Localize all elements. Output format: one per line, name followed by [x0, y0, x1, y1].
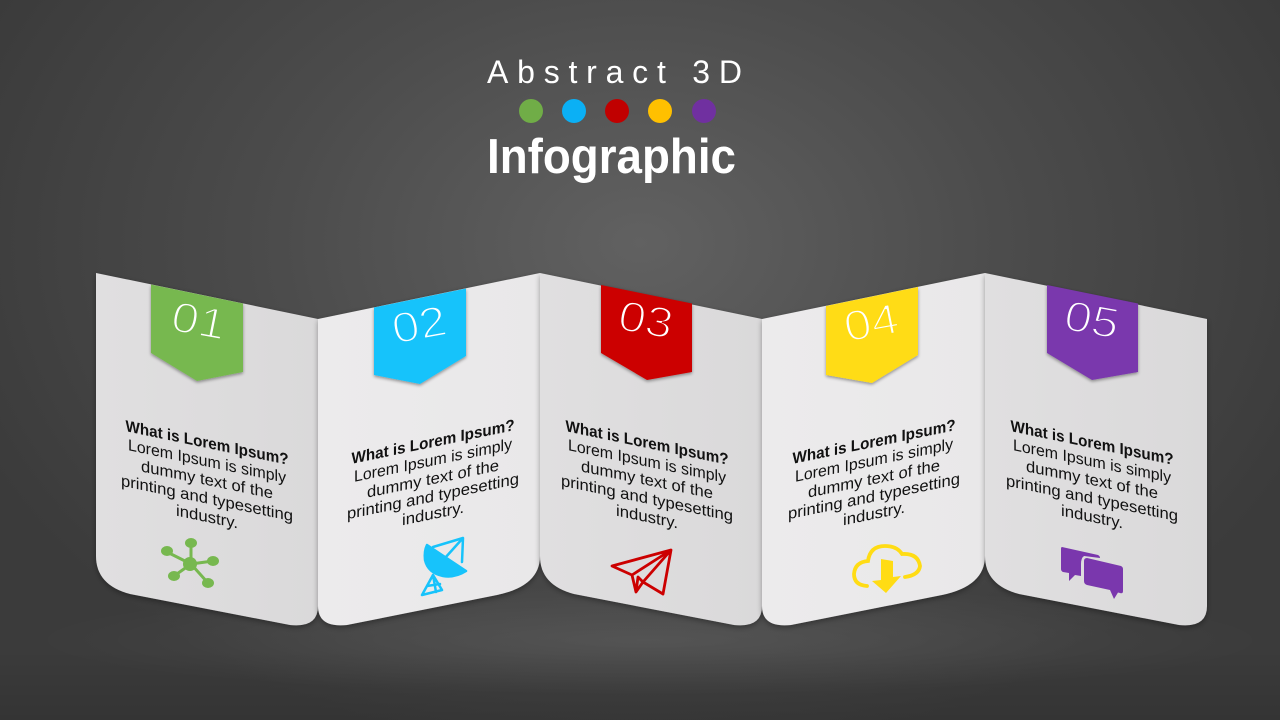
- card 5: [985, 273, 1207, 625]
- icon: satellite dish: [422, 538, 466, 595]
- ribbon 1: [151, 284, 243, 381]
- title line: Abstract 3D: Abstract 3D: [487, 54, 742, 90]
- ribbon 5: [1047, 285, 1138, 380]
- text block 1: Lorem Ipsum is simply: [128, 436, 287, 487]
- number 03: 03: [614, 291, 678, 348]
- ribbon 4: [826, 287, 918, 383]
- icon: paper plane: [612, 550, 671, 594]
- panel 4: [762, 273, 985, 625]
- text block 4: What is Lorem Ipsum?: [792, 416, 956, 468]
- text block 1: What is Lorem Ipsum?: [126, 417, 288, 469]
- icon: cloud download: [854, 546, 920, 593]
- text block 4: [788, 415, 960, 541]
- text block 3: printing and typesetting: [561, 472, 733, 525]
- ribbon 3: [601, 285, 692, 380]
- text block 2: printing and typesetting: [347, 470, 519, 523]
- text block 3: dummy text of the: [581, 457, 713, 503]
- text block 2: dummy text of the: [367, 456, 499, 502]
- text block 4: dummy text of the: [808, 456, 940, 502]
- text block 3: Lorem Ipsum is simply: [568, 436, 727, 487]
- card 1: [96, 273, 318, 625]
- panel 3: [540, 273, 762, 625]
- number 02: 02: [387, 296, 451, 353]
- text block 4: printing and typesetting: [788, 470, 960, 523]
- panel 5: [985, 273, 1207, 625]
- card 2: [318, 273, 540, 625]
- text block 3: What is Lorem Ipsum?: [566, 417, 728, 469]
- text block 5: What is Lorem Ipsum?: [1010, 417, 1174, 469]
- text block 2: industry.: [402, 499, 464, 529]
- text block 5: industry.: [1061, 502, 1123, 532]
- icon: network: [161, 538, 219, 588]
- title line: Infographic: Infographic: [487, 130, 736, 184]
- text block 4: Lorem Ipsum is simply: [795, 435, 954, 486]
- text block 5: printing and typesetting: [1006, 472, 1178, 525]
- number 01: 01: [167, 292, 231, 349]
- text block 3: [561, 416, 733, 544]
- card 4: [762, 273, 985, 625]
- number 04: 04: [839, 294, 903, 351]
- text block 1: industry.: [176, 502, 238, 532]
- icon: chat bubbles: [1061, 547, 1123, 599]
- text block 5: [1006, 416, 1178, 544]
- text block 2: Lorem Ipsum is simply: [354, 435, 513, 486]
- panel 1: [96, 273, 318, 625]
- text block 4: industry.: [843, 499, 905, 529]
- text block 1: [121, 416, 293, 544]
- number 05: 05: [1060, 291, 1124, 348]
- text block 1: printing and typesetting: [121, 472, 293, 525]
- text block 3: industry.: [616, 502, 678, 532]
- card 3: [540, 273, 762, 625]
- panel 2: [318, 273, 540, 625]
- text block 5: dummy text of the: [1026, 457, 1158, 503]
- text block 5: Lorem Ipsum is simply: [1013, 436, 1172, 487]
- ribbon 2: [374, 288, 466, 384]
- text block 2: What is Lorem Ipsum?: [352, 416, 514, 468]
- text block 2: [347, 415, 519, 541]
- title: [487, 54, 742, 184]
- colour dots: [519, 99, 716, 123]
- text block 1: dummy text of the: [141, 457, 273, 503]
